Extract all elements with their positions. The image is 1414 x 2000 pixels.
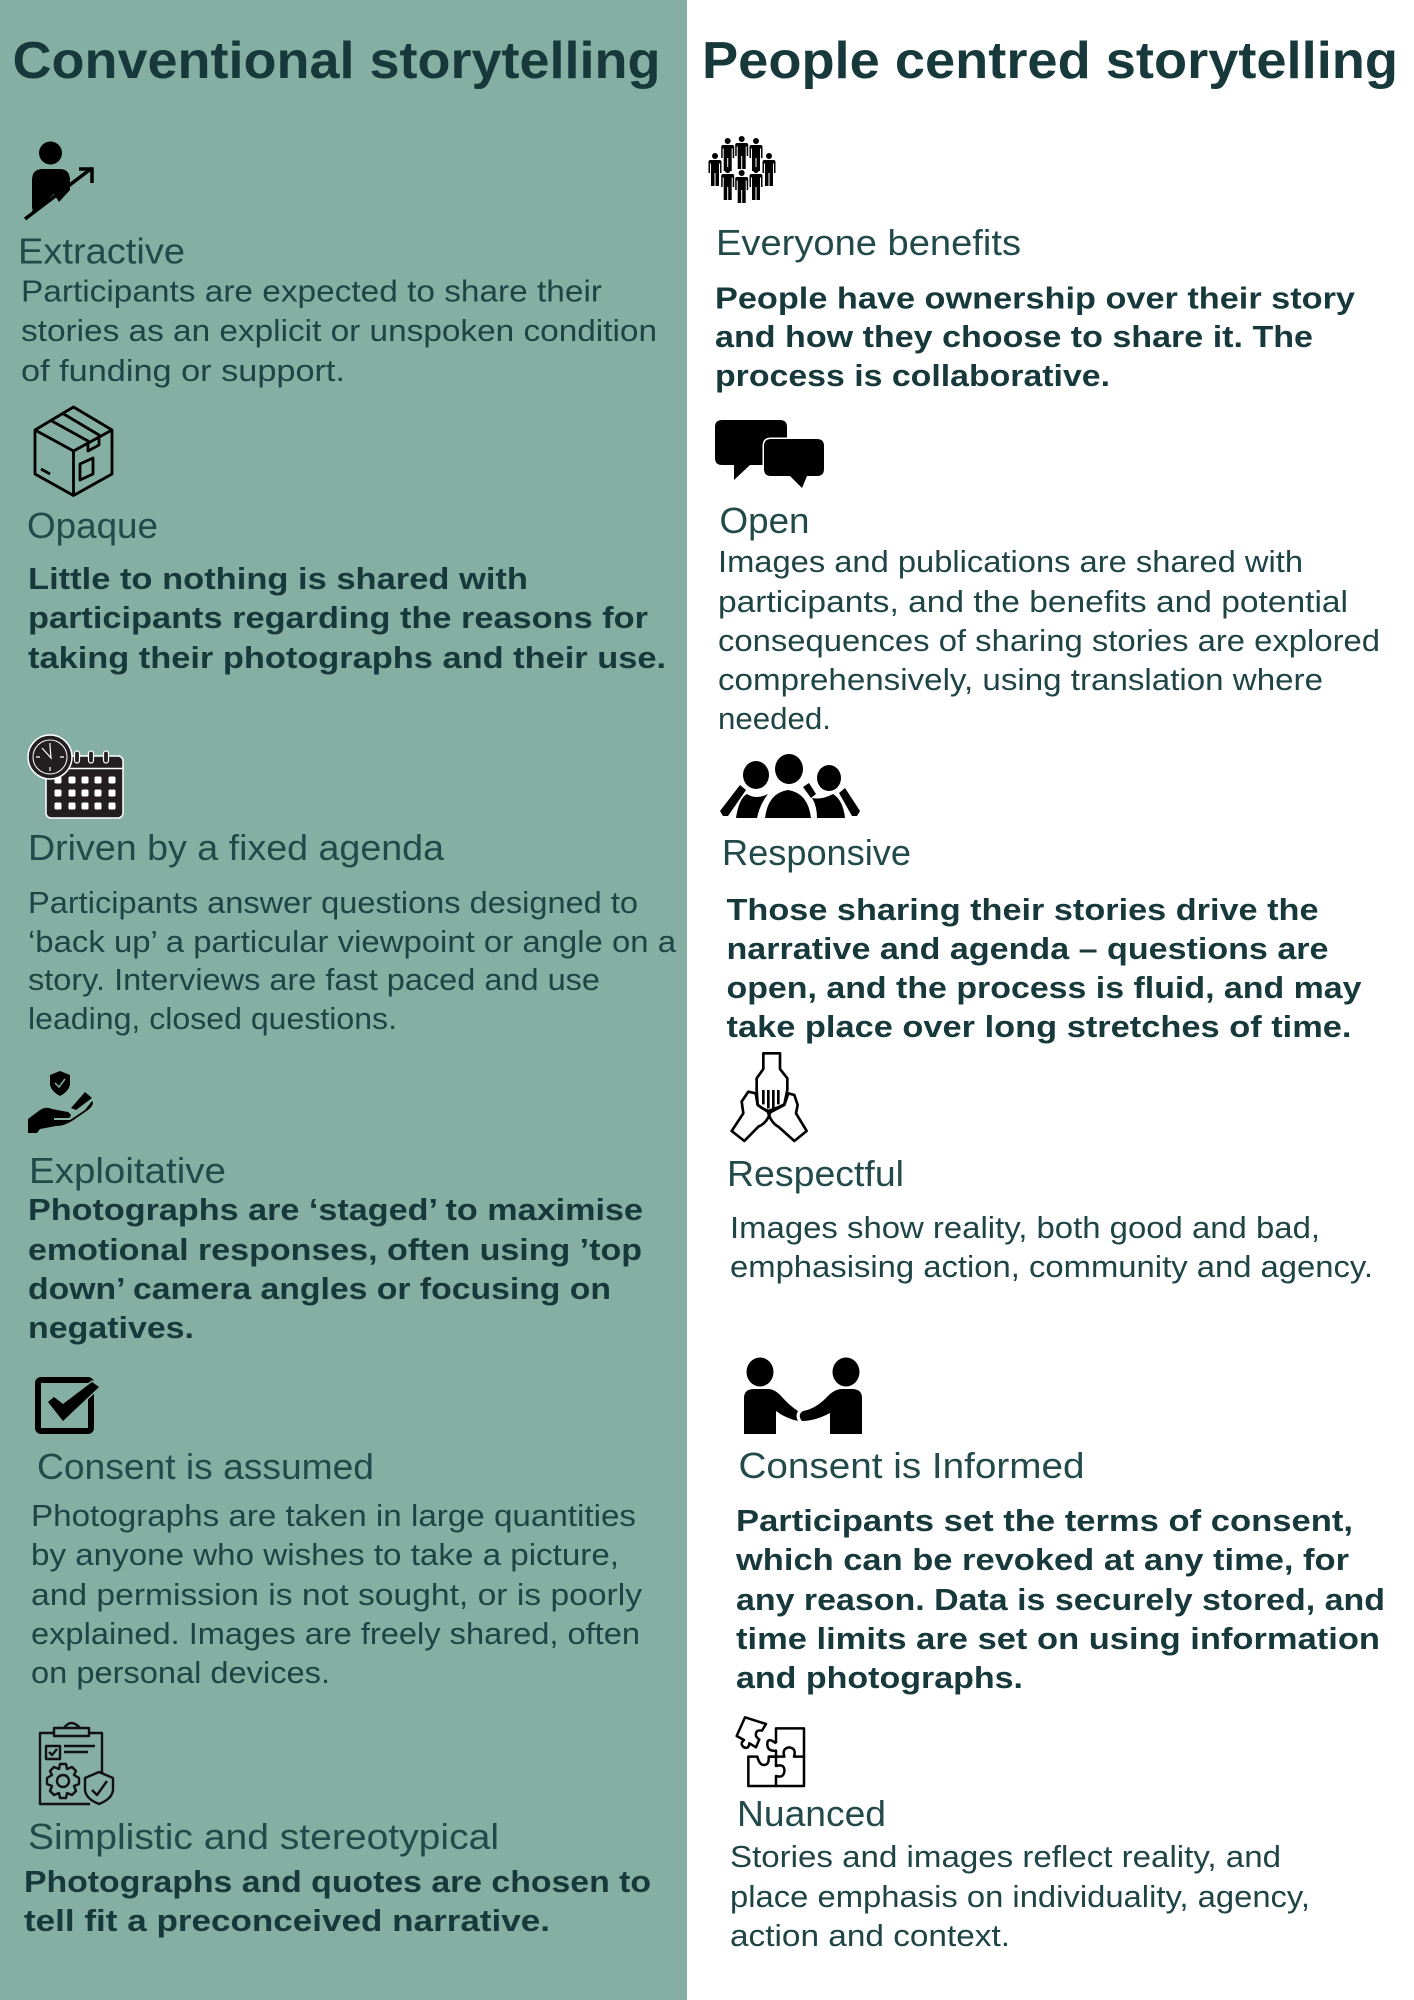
heading: responsive: Responsive [722, 832, 911, 873]
text block: nuanced description: Stories and images reflect reality, and [730, 1839, 1281, 1874]
text block: simplistic description [24, 1865, 651, 1938]
heading: opaque: Opaque [27, 505, 158, 546]
text block: responsive description: take place over long stretches of time. [726, 1010, 1352, 1044]
text block: opaque description: taking their photographs and their use. [28, 641, 666, 675]
text block: exploitative description: emotional responses, often using ’top [28, 1233, 642, 1267]
text block: exploitative description: Photographs are ‘staged’ to maximise [28, 1193, 643, 1227]
icon: hand with shield [28, 1071, 93, 1133]
heading: open: Open [720, 500, 810, 541]
text block: fixed agenda description: story. Interviews are fast paced and use [28, 962, 600, 997]
text block: open description: consequences of sharing stories are explored [718, 623, 1380, 658]
icon: handshake [744, 1358, 862, 1434]
text block: exploitative description: negatives. [28, 1311, 194, 1345]
heading: nuanced: Nuanced [737, 1793, 886, 1834]
text block: nuanced description [730, 1839, 1310, 1953]
text block: consent assumed description: on personal devices. [31, 1655, 330, 1690]
text block: open description: participants, and the benefits and potential [718, 584, 1348, 619]
text block: opaque description: Little to nothing is shared with [28, 562, 528, 596]
text block: informed consent description: which can be revoked at any time, for [735, 1543, 1349, 1577]
text block: exploitative description: down’ camera angles or focusing on [28, 1272, 611, 1306]
text block: fixed agenda description [28, 885, 677, 1036]
text block: open description: Images and publications are shared with [718, 544, 1303, 579]
text block: informed consent description: Participants set the terms of consent, [736, 1504, 1353, 1538]
heading: consent is informed: Consent is Informed [738, 1445, 1084, 1486]
icon: clock and calendar [28, 735, 123, 818]
title: conventional storytelling: Conventional storytelling [12, 32, 660, 90]
heading: respectful: Respectful [727, 1153, 904, 1194]
heading: consent is assumed: Consent is assumed [37, 1446, 374, 1487]
text block: respectful description: Images show reality, both good and bad, [730, 1210, 1320, 1245]
text block: nuanced description: action and context. [730, 1918, 1010, 1953]
text block: consent assumed description: by anyone who wishes to take a picture, [31, 1537, 619, 1572]
panel: conventional storytelling [0, 0, 687, 2000]
text block: responsive description: Those sharing their stories drive the [726, 893, 1318, 927]
heading: exploitative: Exploitative [29, 1150, 226, 1191]
text block: fixed agenda description: leading, closed questions. [28, 1001, 397, 1036]
text block: responsive description [726, 893, 1362, 1044]
text block: consent assumed description: and permission is not sought, or is poorly [31, 1577, 643, 1612]
icon: cardboard box [35, 407, 112, 496]
text block: everyone benefits description: and how they choose to share it. The [715, 320, 1313, 354]
text block: everyone benefits description: process is collaborative. [715, 359, 1110, 393]
text block: open description: needed. [718, 701, 831, 736]
panel: people centred storytelling [702, 32, 1398, 1953]
text block: nuanced description: place emphasis on individuality, agency, [730, 1879, 1310, 1914]
icon: speech bubbles [715, 420, 824, 488]
text block: exploitative description [28, 1193, 643, 1345]
text block: informed consent description [735, 1504, 1385, 1695]
text block: informed consent description: any reason. Data is securely stored, and [736, 1583, 1385, 1617]
icon: joined hands [732, 1053, 807, 1141]
text block: consent assumed description: explained. Images are freely shared, often [31, 1616, 640, 1651]
heading: extractive: Extractive [18, 230, 185, 272]
icon: checkbox [38, 1380, 99, 1431]
text block: simplistic description: tell fit a preconceived narrative. [24, 1904, 550, 1938]
heading: driven by a fixed agenda: Driven by a fixed agenda [28, 827, 445, 868]
text block: opaque description [28, 562, 666, 675]
text block: respectful description [730, 1210, 1373, 1284]
icon: group of people [708, 136, 776, 203]
text block: extractive description: Participants are expected to share their [21, 274, 602, 308]
heading: everyone benefits: Everyone benefits [716, 222, 1021, 263]
text block: fixed agenda description: ‘back up’ a particular viewpoint or angle on a [28, 924, 677, 959]
text block: fixed agenda description: Participants answer questions designed to [28, 885, 638, 920]
heading: simplistic and stereotypical: Simplistic and stereotypical [28, 1816, 499, 1857]
text block: extractive description: of funding or support. [21, 353, 345, 388]
text block: informed consent description: time limits are set on using information [736, 1622, 1380, 1656]
text block: everyone benefits description [715, 282, 1355, 393]
icon: clipboard with gear and shield [40, 1723, 113, 1804]
title: people centred storytelling: People centred storytelling [702, 32, 1398, 90]
text block: responsive description: open, and the process is fluid, and may [726, 971, 1362, 1005]
text block: respectful description: emphasising action, community and agency. [730, 1249, 1373, 1284]
text block: simplistic description: Photographs and quotes are chosen to [24, 1865, 651, 1899]
icon: puzzle pieces [737, 1717, 804, 1786]
text block: extractive description [21, 274, 657, 388]
text block: consent assumed description: Photographs are taken in large quantities [31, 1498, 636, 1533]
text block: responsive description: narrative and agenda – questions are [726, 932, 1328, 966]
text block: informed consent description: and photographs. [736, 1661, 1023, 1695]
text block: opaque description: participants regarding the reasons for [28, 601, 648, 635]
text block: open description: comprehensively, using translation where [718, 662, 1323, 697]
text block: consent assumed description [31, 1498, 643, 1690]
icon: person with arrow [25, 142, 92, 219]
text block: everyone benefits description: People have ownership over their story [715, 282, 1355, 316]
text block: open description [718, 544, 1380, 736]
icon: three people [720, 754, 860, 818]
text block: extractive description: stories as an explicit or unspoken condition [21, 313, 657, 348]
